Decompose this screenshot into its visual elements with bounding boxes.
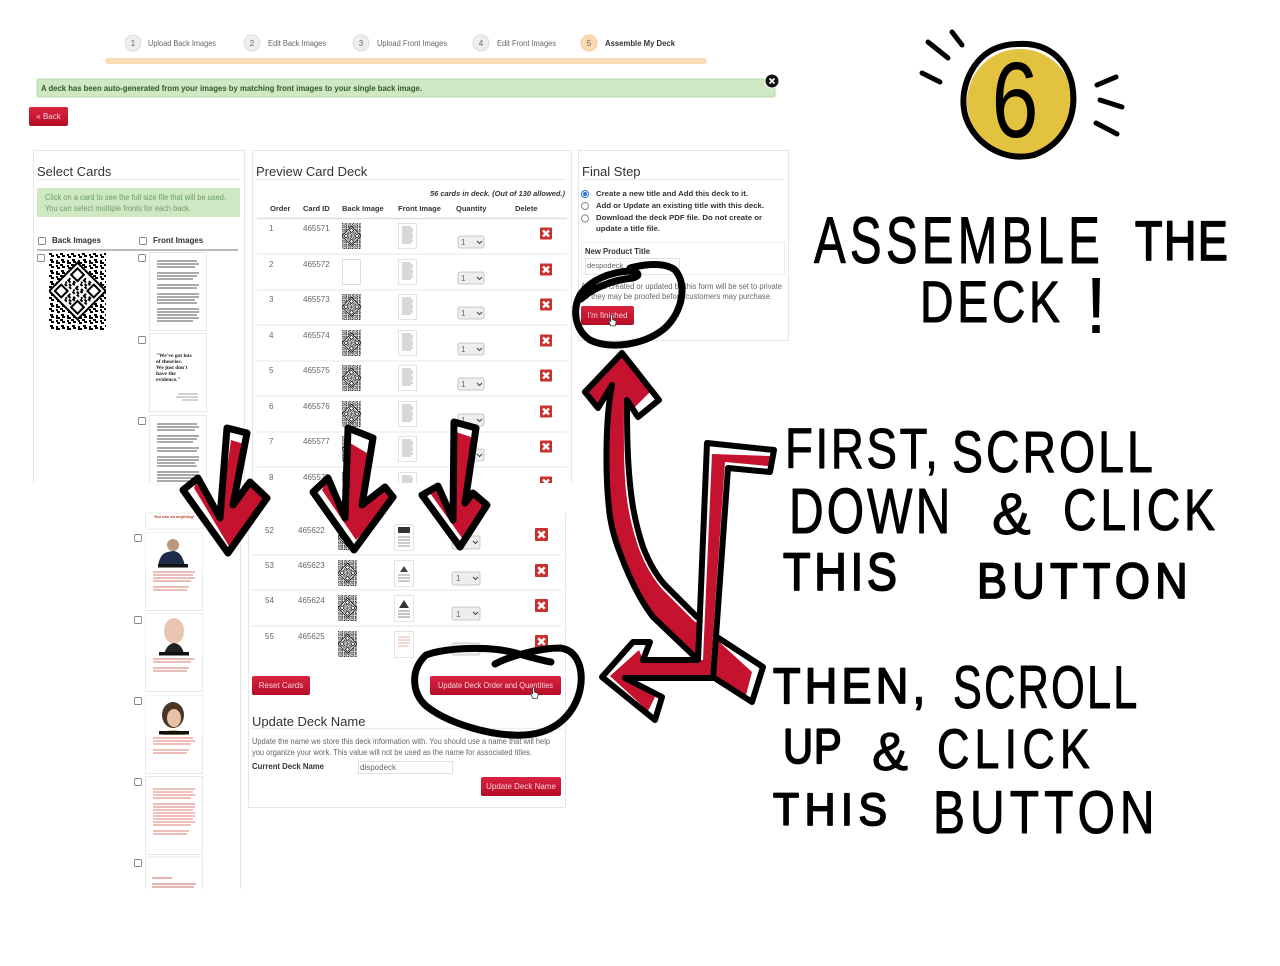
card fragment — [146, 513, 204, 529]
row 4: 4 — [269, 331, 274, 340]
row 7 — [257, 436, 567, 467]
row 6: 1 — [461, 416, 466, 425]
private notice: All titles created or updated by this form will be set to private — [581, 282, 783, 291]
current deck name field — [252, 762, 452, 774]
step 2 — [244, 35, 326, 51]
update deck order button — [430, 676, 561, 698]
arrow: down right — [422, 422, 487, 547]
table header: Card ID — [303, 204, 330, 213]
step 5 active: Assemble My Deck — [605, 39, 676, 48]
row 54 — [252, 595, 562, 626]
row 1: 465571 — [303, 224, 330, 233]
private notice — [581, 282, 783, 301]
front card 2 quote: evidence." — [156, 377, 181, 383]
heading: final step: Final Step — [582, 164, 641, 179]
badge: number 6 — [964, 39, 1073, 160]
card: portrait woman — [134, 696, 202, 774]
instruction: then: & — [872, 722, 908, 782]
arrow: from first step to update button — [602, 443, 774, 720]
row 6 — [257, 401, 567, 432]
reset cards button: Reset Cards — [259, 681, 303, 690]
row 55: 465625 — [298, 632, 325, 641]
row 2 — [257, 260, 567, 290]
instruction: first: THIS — [783, 543, 897, 602]
front card 2 quote: "We've got lots — [156, 353, 192, 359]
row 3 — [257, 294, 567, 325]
back button: « Back — [36, 112, 62, 121]
I'm finished button — [581, 306, 634, 326]
current deck name field: Current Deck Name — [252, 762, 325, 771]
update deck order button: Update Deck Order and Quantities — [438, 681, 553, 690]
update deck description — [252, 737, 551, 757]
step 1: Upload Back Images — [148, 39, 216, 48]
table header: Quantity — [456, 204, 487, 213]
row 2: 1 — [461, 274, 466, 283]
title: assemble the deck: DECK — [920, 270, 1060, 335]
row 8 — [269, 472, 552, 498]
instruction: then: UP — [783, 719, 842, 774]
row 1: 1 — [461, 238, 466, 247]
table header: Order — [270, 204, 291, 213]
heading: preview card deck: Preview Card Deck — [256, 164, 368, 179]
instruction: then — [773, 655, 1155, 846]
row 4: 1 — [461, 345, 466, 354]
hand-drawn circle around update button — [415, 648, 581, 735]
new product title field: despodeck — [587, 261, 624, 270]
row 2: 2 — [269, 260, 274, 269]
heading: update deck name: Update Deck Name — [252, 714, 365, 729]
success alert: A deck has been auto-generated from your images by matching front images to your single back image. — [41, 84, 422, 93]
badge: number 6: 6 — [992, 39, 1038, 160]
instruction: then: SCROLL — [953, 655, 1137, 722]
row 54: 1 — [456, 610, 461, 619]
panel: lower preview table — [248, 513, 566, 808]
radio options: Download the deck PDF file. Do not create or — [596, 213, 762, 222]
row 6: 6 — [269, 402, 274, 411]
row 55 — [265, 631, 548, 658]
instruction: first: DOWN — [789, 475, 950, 547]
info box: Click on a card to see the full size file that will be used. — [45, 193, 226, 202]
current deck name field: dispodeck — [360, 763, 397, 772]
progress bar — [105, 58, 707, 64]
arrow: up to I'm finished — [585, 353, 763, 702]
row 5: 5 — [269, 366, 274, 375]
row 52: 465622 — [298, 526, 325, 535]
reset cards button — [252, 676, 310, 695]
back image QR card — [38, 253, 106, 330]
I'm finished button: I'm finished — [587, 311, 628, 320]
table header: Back Image — [342, 204, 384, 213]
step 4 — [473, 35, 556, 51]
instruction: first: FIRST, — [785, 416, 938, 480]
new product title field — [582, 242, 784, 274]
panel: preview card deck — [252, 150, 572, 498]
row 5 — [257, 365, 567, 396]
update deck name button: Update Deck Name — [486, 782, 556, 791]
step 3: Upload Front Images — [377, 39, 447, 48]
card: portrait suit — [134, 532, 202, 610]
instruction: first: BUTTON — [977, 554, 1188, 610]
front card 2 quote: of theories. — [156, 359, 183, 365]
card: portrait bald man — [134, 614, 202, 692]
step 1: 1 — [131, 39, 136, 48]
step 5 active — [581, 35, 676, 51]
update deck name button — [481, 777, 561, 796]
update deck description: you organize your work. This value will not be used as the name for associated titles. — [252, 748, 532, 757]
title: assemble the deck — [814, 204, 1228, 350]
heading: select cards: Select Cards — [37, 164, 112, 179]
table header: Delete — [515, 204, 538, 213]
title: assemble the deck: THE — [1135, 209, 1228, 272]
row 3: 3 — [269, 295, 274, 304]
private notice: so they may be proofed before customers may purchase. — [581, 292, 772, 301]
title: assemble the deck: ASSEMBLE — [814, 204, 1100, 278]
white gap between page scroll crops — [0, 483, 800, 513]
deck count: 56 cards in deck. (Out of 130 allowed.) — [430, 189, 565, 198]
instruction: first: SCROLL — [952, 420, 1153, 485]
row 7: 1 — [461, 451, 466, 460]
info box — [37, 188, 240, 217]
step 4: 4 — [479, 39, 484, 48]
radio options — [582, 189, 764, 233]
panel: final step — [578, 150, 788, 340]
front card 3 — [138, 416, 206, 494]
column headers: Front Images — [153, 236, 204, 245]
step 3: 3 — [359, 39, 364, 48]
instruction: first: & — [992, 482, 1031, 547]
row 55: 55 — [265, 632, 274, 641]
row 2: 465572 — [303, 260, 330, 269]
row 3: 1 — [461, 309, 466, 318]
new product title field: New Product Title — [585, 247, 651, 256]
radio options: Create a new title and Add this deck to it. — [596, 189, 748, 198]
row 5: 1 — [461, 380, 466, 389]
card: red text — [134, 776, 202, 854]
success alert — [37, 74, 779, 97]
step 3 — [353, 35, 447, 51]
row 53: 1 — [456, 574, 461, 583]
row 7: 7 — [269, 437, 274, 446]
row 8: 8 — [269, 473, 274, 482]
radio options: Add or Update an existing title with this deck. — [596, 201, 764, 210]
card: cut off — [134, 857, 202, 889]
front card 2 quote: We just don't — [156, 365, 188, 371]
front card 2 quote — [138, 334, 206, 412]
table header — [257, 204, 567, 218]
row 4 — [257, 330, 567, 361]
front card 1 — [138, 252, 206, 330]
sparks around badge — [922, 32, 1122, 134]
row 5: 465575 — [303, 366, 330, 375]
row 7: 465577 — [303, 437, 330, 446]
row 1: 1 — [269, 224, 274, 233]
row 4: 465574 — [303, 331, 330, 340]
step 2: 2 — [250, 39, 255, 48]
front card 2 quote: have the — [156, 371, 176, 377]
update deck description: Update the name we store this deck information with. You should use a name that will help — [252, 737, 551, 746]
column headers: Back Images — [52, 236, 101, 245]
step 2: Edit Back Images — [268, 39, 326, 48]
back button — [29, 107, 68, 126]
step 4: Edit Front Images — [497, 39, 556, 48]
row 3: 465573 — [303, 295, 330, 304]
panel: lower select cards column — [134, 513, 240, 889]
card fragment: You can do anything! — [154, 514, 194, 519]
panel: select cards — [34, 150, 244, 494]
radio options: update a title file. — [596, 224, 660, 233]
row 53: 465623 — [298, 561, 325, 570]
instruction: first — [783, 416, 1215, 610]
row 53: 53 — [265, 561, 274, 570]
instruction: then: BUTTON — [933, 779, 1155, 846]
row 8: 465578 — [303, 473, 330, 482]
instruction: then: THIS — [773, 785, 887, 835]
table header: Front Image — [398, 204, 441, 213]
instruction: then: CLICK — [937, 717, 1090, 780]
step 5 active: 5 — [587, 39, 592, 48]
info box: You can select multiple fronts for each back. — [45, 204, 191, 213]
row 54: 465624 — [298, 596, 325, 605]
instruction: first: CLICK — [1063, 478, 1215, 543]
row 52 — [252, 524, 562, 555]
title: assemble the deck: ! — [1085, 261, 1107, 350]
instruction: then: THEN, — [773, 659, 925, 715]
row 52: 52 — [265, 526, 274, 535]
column headers — [37, 236, 238, 250]
row 1 — [257, 223, 567, 254]
row 6: 465576 — [303, 402, 330, 411]
stepper navigation — [125, 35, 676, 51]
hand-drawn circle around I'm finished — [576, 264, 682, 345]
row 53 — [252, 560, 562, 590]
arrow: down middle — [313, 428, 397, 550]
arrow: down left — [183, 428, 271, 553]
step 1 — [125, 35, 216, 51]
row 54: 54 — [265, 596, 274, 605]
